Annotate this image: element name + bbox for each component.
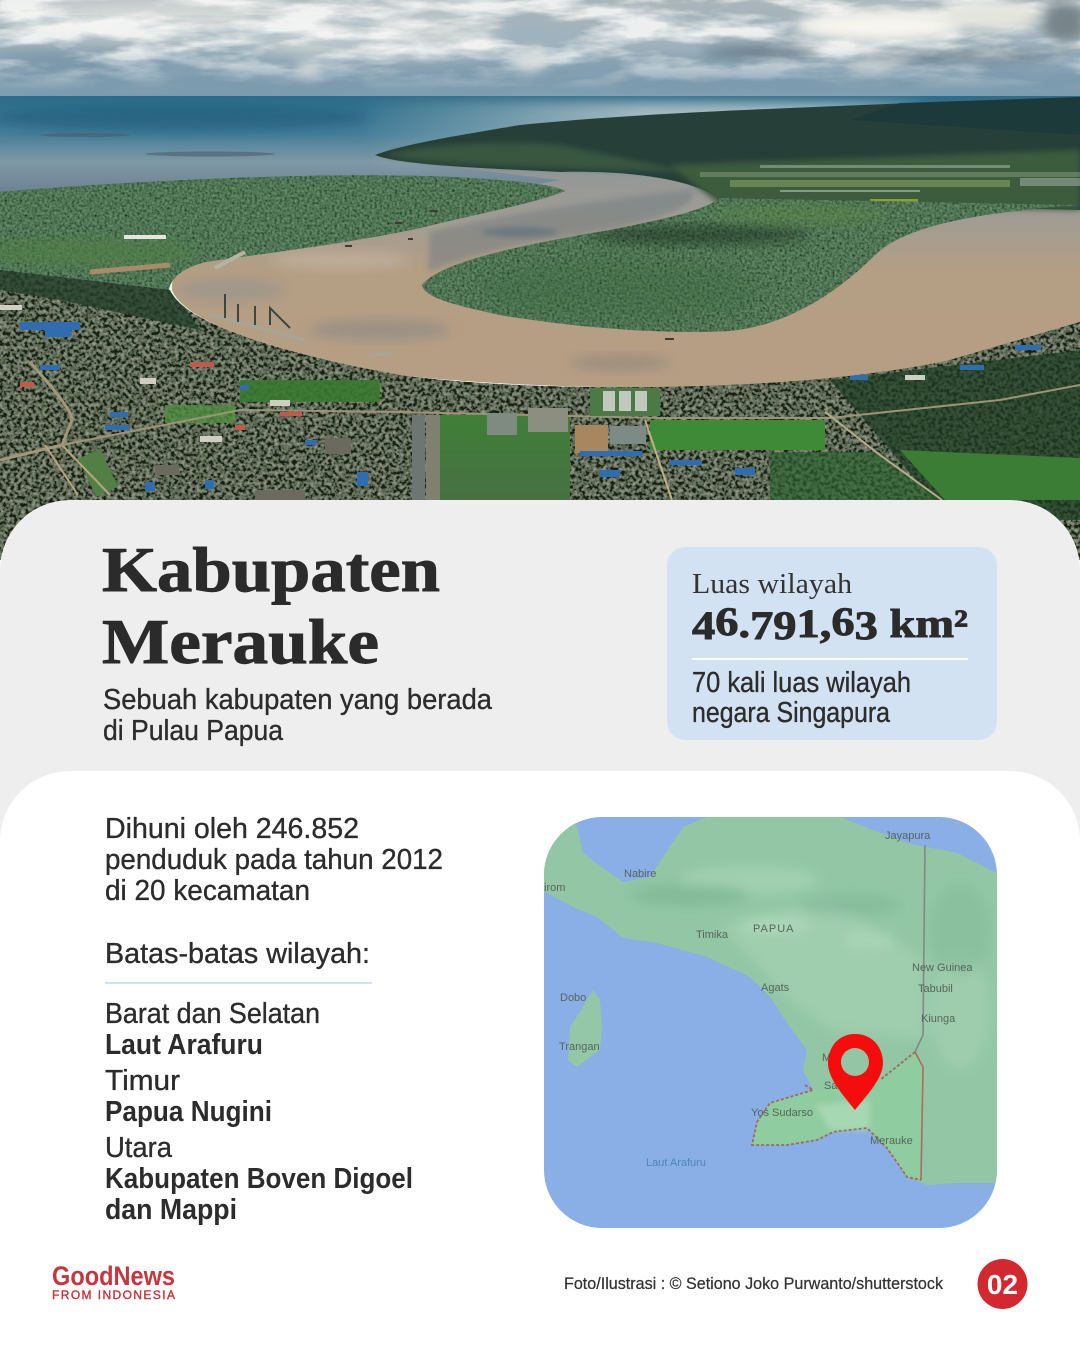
population text (105, 813, 443, 907)
place names: Kiunga (921, 1013, 956, 1025)
logo: GoodNews from Indonesia (52, 1261, 175, 1302)
mangrove forest lobes (0, 175, 1077, 332)
hero photo: Merauke river aerial view (0, 0, 1080, 560)
town and fields along the shore (0, 260, 1080, 560)
port with cranes and piers (90, 210, 674, 356)
borders list: Laut Arafuru (105, 1029, 263, 1061)
area value: , (820, 601, 831, 646)
area value: km² (878, 601, 968, 646)
map of Papua (544, 817, 997, 1228)
place names: Merauke (870, 1135, 913, 1147)
borders heading: Batas-batas wilayah: (105, 938, 370, 970)
area label: Luas wilayah (692, 568, 853, 600)
place names: irom (544, 882, 565, 894)
population text: di 20 kecamatan (105, 875, 310, 907)
area comparison: 70 kali luas wilayah (692, 667, 911, 699)
area comparison (692, 667, 911, 729)
title: Kabupaten (102, 535, 440, 605)
place names: PAPUA (753, 923, 794, 935)
borders list: Kabupaten Boven Digoel (105, 1163, 413, 1195)
area comparison: negara Singapura (692, 697, 891, 729)
logo: GoodNews from Indonesia: FROM INDONESIA (52, 1288, 175, 1302)
sky with clouds (0, 0, 1080, 98)
area value: 4 (692, 603, 715, 648)
panel: grey title panel (0, 500, 1080, 900)
place names: Agats (761, 982, 790, 994)
page number badge (978, 1259, 1028, 1309)
title (102, 535, 440, 677)
area value: 7 (750, 603, 773, 648)
place names: Sa (824, 1080, 838, 1092)
place names: Trangan (559, 1041, 600, 1053)
title: Merauke (102, 607, 379, 677)
Aru island (568, 990, 602, 1067)
boundary lines (752, 845, 925, 1180)
area value: 6 (715, 599, 738, 644)
borders list: Papua Nugini (105, 1096, 272, 1128)
area value: 3 (855, 603, 878, 648)
borders list: dan Mappi (105, 1194, 237, 1226)
land mass (544, 817, 997, 1185)
place names: Jayapura (885, 830, 931, 842)
upper land with farm fields (375, 97, 1080, 210)
place names: Tabubil (918, 983, 953, 995)
subtitle (103, 684, 493, 747)
place names: Dobo (560, 992, 586, 1004)
borders list: Utara (105, 1132, 173, 1164)
terrain shading (630, 866, 990, 1070)
borders list (105, 998, 413, 1226)
area value: 1 (797, 601, 820, 646)
place names: Nabire (624, 868, 656, 880)
borders list: Timur (105, 1065, 180, 1097)
sea (0, 96, 1080, 192)
area value: . (738, 601, 750, 646)
place names: Laut Arafuru (646, 1157, 706, 1169)
place names: M (822, 1052, 831, 1064)
area value: 6 (831, 599, 855, 644)
population text: Dihuni oleh 246.852 (105, 813, 359, 845)
Merauke regency highlight (752, 1090, 906, 1176)
icon: location pin (828, 1034, 883, 1110)
photo credit: Foto/Ilustrasi : © Setiono Joko Purwanto/shutterstock (564, 1274, 943, 1293)
panel: white content panel (0, 771, 1080, 1350)
subtitle: Sebuah kabupaten yang berada (103, 684, 493, 716)
logo: GoodNews from Indonesia: GoodNews (52, 1261, 175, 1291)
place names: Yos Sudarso (751, 1107, 813, 1119)
panel: area callout (667, 547, 997, 740)
borders list: Barat dan Selatan (105, 998, 320, 1030)
place names: Timika (696, 929, 729, 941)
page number badge: 02 (987, 1269, 1018, 1300)
subtitle: di Pulau Papua (103, 715, 284, 747)
river (172, 158, 1080, 388)
population text: penduduk pada tahun 2012 (105, 844, 443, 876)
place names: New Guinea (912, 962, 973, 974)
area value: 9 (773, 603, 797, 648)
place names (544, 830, 973, 1169)
